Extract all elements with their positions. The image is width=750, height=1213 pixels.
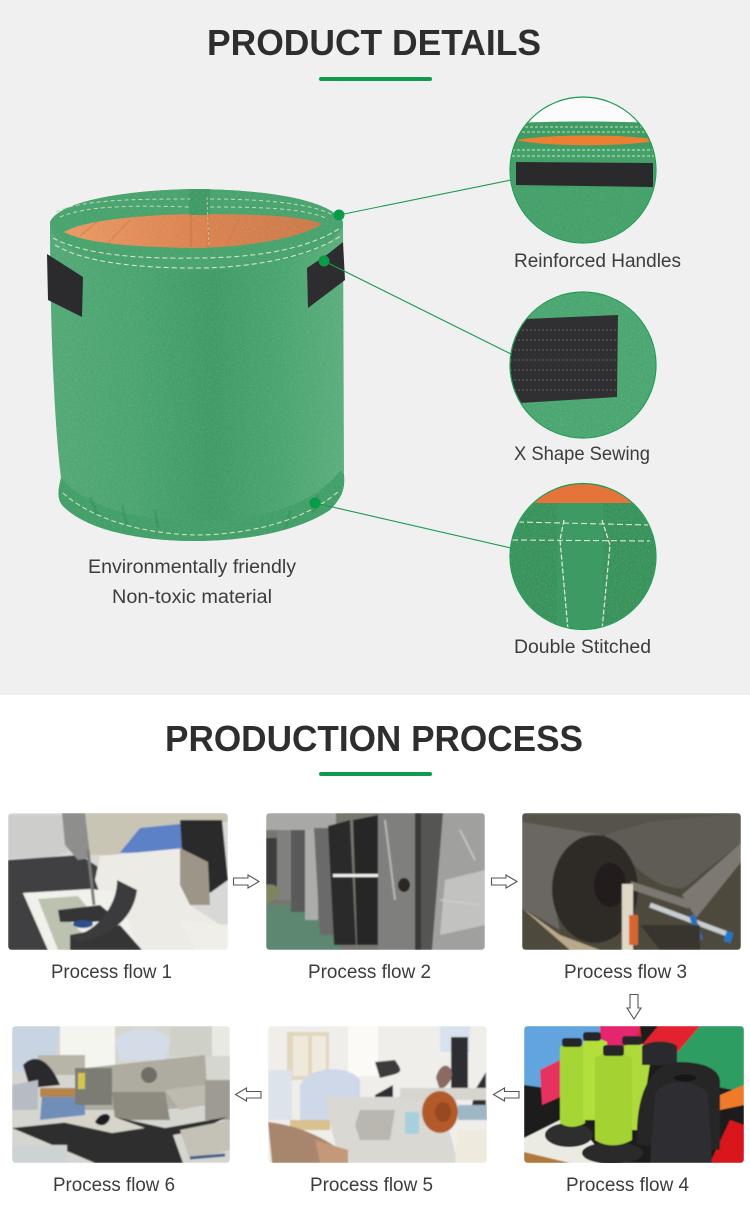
photo: process flow 4: [524, 1026, 744, 1164]
caption: process flow 4: Process flow 4: [566, 1175, 689, 1196]
detail circle: reinforced handles: [509, 96, 657, 244]
label: reinforced handles: Reinforced Handles: [514, 251, 681, 272]
callout line: handles: [334, 180, 511, 220]
photo: process flow 5: [268, 1026, 487, 1163]
title underline: [319, 77, 432, 81]
callout line: stitching: [310, 498, 511, 548]
photo: process flow 3: [522, 813, 741, 950]
arrow: flow 3 to 4: [627, 994, 641, 1019]
caption: environmentally friendly: Non-toxic material: [112, 587, 272, 608]
caption: process flow 5: Process flow 5: [310, 1175, 433, 1196]
caption: environmentally friendly: [88, 557, 297, 608]
callout line: sewing: [318, 256, 511, 354]
arrow: flow 5 to 6: [236, 1088, 261, 1101]
arrow: flow 4 to 5: [494, 1088, 519, 1101]
title: product details: PRODUCT DETAILS: [207, 22, 541, 63]
photo: process flow 1: [8, 813, 228, 950]
arrow: flow 2 to 3: [492, 875, 517, 888]
photo: process flow 6: [12, 1026, 230, 1163]
bag handle left: [47, 254, 83, 317]
arrow: flow 1 to 2: [234, 875, 259, 888]
detail circle: x shape sewing: [509, 291, 657, 439]
photo: green grow bag: [45, 185, 350, 545]
bag handle right: [307, 242, 345, 308]
detail circle: double stitched: [509, 482, 657, 630]
caption: process flow 3: Process flow 3: [564, 962, 687, 983]
panel: product details: [0, 0, 750, 695]
caption: environmentally friendly: Environmentally friendly: [88, 557, 297, 578]
label: x shape sewing: X Shape Sewing: [514, 444, 650, 465]
photo: process flow 2: [266, 813, 485, 950]
caption: process flow 2: Process flow 2: [308, 962, 431, 983]
title underline: [319, 772, 432, 776]
caption: process flow 6: Process flow 6: [53, 1175, 175, 1196]
title: production process: PRODUCTION PROCESS: [165, 718, 583, 759]
panel: production process: [8, 726, 744, 1191]
caption: process flow 1: Process flow 1: [51, 962, 172, 983]
label: double stitched: Double Stitched: [514, 637, 651, 658]
